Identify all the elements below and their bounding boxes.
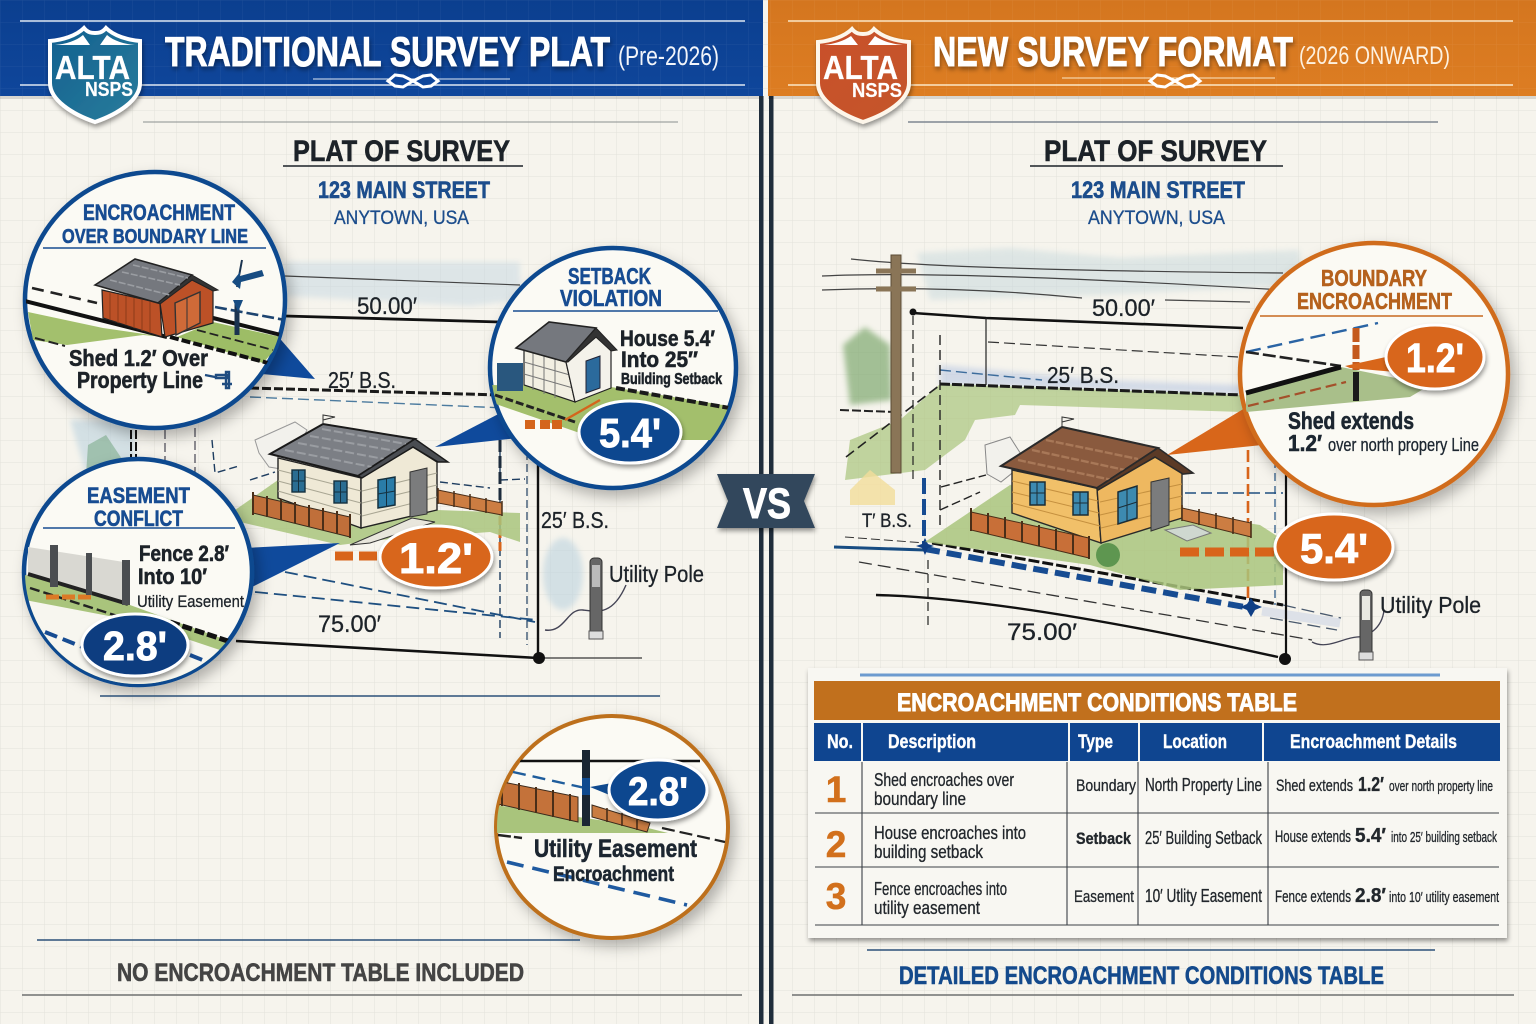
heading: plat of survey right: PLAT OF SURVEY xyxy=(1044,135,1267,168)
icon: ALTA NSPS shield blue xyxy=(50,28,140,122)
circle: boundary encroachment: Shed extends xyxy=(1288,408,1414,435)
rule under right header xyxy=(908,121,1438,123)
address left xyxy=(318,177,490,229)
orange dashes marker right xyxy=(1180,548,1280,556)
circle: easement conflict: EASEMENT xyxy=(87,483,190,508)
table row 2: 25′ Building Setback xyxy=(1145,828,1263,848)
label 50.00 left: 50.00′ xyxy=(357,293,417,320)
table row 3: 2.8′ xyxy=(1355,885,1386,907)
label utility pole right: Utility Pole xyxy=(1380,592,1481,618)
address right: 123 MAIN STREET xyxy=(1071,177,1245,204)
table row 1: 1.2′ xyxy=(1358,774,1384,796)
table row 2: building setback xyxy=(874,842,984,862)
circle: easement conflict: Into 10′ xyxy=(138,564,207,589)
table header row: Description xyxy=(888,732,976,753)
table row 3: utility easement xyxy=(874,898,980,918)
table row 3: Fence extends xyxy=(1275,887,1351,906)
table row 1: Shed encroaches over xyxy=(874,770,1014,790)
label 25 B.S. top left: 25′ B.S. xyxy=(328,367,396,393)
table row 3: 10′ Utlity Easement xyxy=(1145,886,1262,906)
callout pointer to oval from easement circle xyxy=(245,543,340,588)
table row 3: 3 xyxy=(826,876,846,917)
circle: setback violation: SETBACK xyxy=(568,263,651,289)
circle: easement conflict: Fence 2.8′ xyxy=(139,541,229,566)
badge 1.2 right: 1.2' xyxy=(1406,335,1464,381)
badge 5.4 left xyxy=(579,401,681,463)
table row 2: House encroaches into xyxy=(874,823,1026,843)
table row 1: 1 xyxy=(826,769,846,810)
table row 3: Easement xyxy=(1074,887,1134,906)
table title bar: ENCROACHMENT CONDITIONS TABLE xyxy=(897,689,1297,717)
circle: utility easement encroachment: Utility Easement xyxy=(534,835,698,863)
address right: ANYTOWN, USA xyxy=(1088,208,1225,229)
icon: yellow house right xyxy=(925,417,1283,590)
badge 2.8 on utility circle xyxy=(609,760,707,820)
table header row: Type xyxy=(1078,732,1113,753)
table header row: No. xyxy=(827,732,853,753)
table header row: Encroachment Details xyxy=(1290,732,1457,753)
circle: easement conflict: Utility Easement xyxy=(137,592,244,611)
circle: boundary encroachment xyxy=(1240,243,1508,505)
label side B.S. right panel: T′ B.S. xyxy=(862,511,912,532)
left title: TRADITIONAL SURVEY PLAT xyxy=(165,28,610,75)
circle: encroachment over boundary line: ENCROACHMENT xyxy=(83,200,235,225)
icon: grey house left xyxy=(228,415,520,545)
right plat drawing xyxy=(822,248,1384,665)
callout pointer to boundary circle xyxy=(1167,405,1262,455)
circle: utility easement encroachment: Encroachment xyxy=(553,863,674,886)
address right xyxy=(1071,177,1245,229)
table row 2: House extends xyxy=(1275,827,1351,846)
VS banner xyxy=(717,474,815,528)
table row 2 xyxy=(826,823,1497,865)
callout pointer to setback circle xyxy=(435,408,518,447)
table grid lines xyxy=(815,762,1499,925)
right header ornament xyxy=(1150,75,1200,87)
rule under left header xyxy=(143,121,678,123)
orange dashes marker left xyxy=(335,552,380,560)
VS banner: VS xyxy=(743,480,791,528)
badge 5.4 right xyxy=(1275,514,1393,580)
label 25 B.S. right panel: 25′ B.S. xyxy=(1047,362,1119,388)
circle: boundary encroachment: over north propery Line xyxy=(1328,435,1479,455)
left title date: (Pre-2026) xyxy=(618,41,719,71)
label utility pole left: Utility Pole xyxy=(609,561,704,587)
table row 2: 2 xyxy=(826,824,846,865)
icon: ALTA NSPS shield blue: NSPS xyxy=(85,79,133,101)
circle: encroachment over boundary line: Shed 1.2′ Over xyxy=(69,345,208,371)
icon: utility pole left xyxy=(589,558,603,639)
table row 1: boundary line xyxy=(874,789,966,809)
circle: setback violation: Into 25″ xyxy=(621,347,698,372)
circle: utility easement encroachment xyxy=(495,716,728,938)
circle: encroachment over boundary line: Property Line xyxy=(77,367,203,393)
left plat drawing xyxy=(70,262,642,664)
circle: boundary encroachment: BOUNDARY xyxy=(1321,265,1427,291)
badge 2.8 on easement circle: 2.8' xyxy=(103,623,167,669)
right header band xyxy=(768,0,1536,99)
table header row: Location xyxy=(1163,732,1227,753)
table row 3 xyxy=(826,876,1500,918)
circle: boundary encroachment: 1.2′ xyxy=(1288,430,1322,456)
table row 1: North Property Line xyxy=(1145,775,1262,795)
circle: boundary encroachment: ENCROACHMENT xyxy=(1297,288,1452,314)
address left: 123 MAIN STREET xyxy=(318,177,490,204)
circle: easement conflict: CONFLICT xyxy=(94,506,183,531)
panel: new survey format xyxy=(768,0,1536,995)
label 75.00 right: 75.00′ xyxy=(1007,619,1078,646)
caption: no encroachment table: NO ENCROACHMENT TABLE INCLUDED xyxy=(117,959,524,987)
table: encroachment conditions xyxy=(808,668,1507,938)
table row 1: Boundary xyxy=(1076,776,1136,795)
badge 5.4 left: 5.4' xyxy=(599,410,661,456)
circle: setback violation: VIOLATION xyxy=(560,285,662,311)
badge 1.2 right xyxy=(1386,325,1484,389)
badge 1.2 left: 1.2' xyxy=(399,535,473,583)
icon: ALTA NSPS shield blue: ALTA xyxy=(55,49,130,86)
circle: easement conflict xyxy=(24,459,252,690)
table row 1: Shed extends xyxy=(1276,776,1353,795)
icon: ALTA NSPS shield orange: ALTA xyxy=(823,49,898,86)
left header ornament xyxy=(388,75,438,87)
callout pointer to encroachment circle xyxy=(240,318,315,379)
icon: ALTA NSPS shield orange: NSPS xyxy=(852,80,902,102)
badge 2.8 on utility circle: 2.8' xyxy=(628,770,688,814)
table title bar xyxy=(814,681,1500,720)
circle: setback violation: Building Setback xyxy=(621,371,722,388)
badge 1.2 left xyxy=(380,526,492,588)
panel: traditional survey plat xyxy=(0,0,763,995)
center divider xyxy=(759,96,774,1024)
circle: encroachment over boundary line xyxy=(25,172,285,428)
badge 2.8 on easement circle xyxy=(82,614,188,676)
badge 5.4 right: 5.4' xyxy=(1300,525,1368,572)
caption: detailed table: DETAILED ENCROACHMENT CONDITIONS TABLE xyxy=(899,962,1384,990)
icon: utility pole right xyxy=(1359,590,1373,660)
table row 2: 5.4′ xyxy=(1355,825,1386,847)
label 50.00 right: 50.00′ xyxy=(1092,295,1155,322)
table row 1 xyxy=(826,769,1493,810)
right title date: (2026 ONWARD) xyxy=(1299,42,1450,70)
address left: ANYTOWN, USA xyxy=(334,208,469,229)
label 75.00 left: 75.00′ xyxy=(318,611,381,638)
table header row xyxy=(814,723,1500,761)
right title: NEW SURVEY FORMAT xyxy=(933,28,1293,75)
circle: setback violation xyxy=(490,248,736,488)
circle: setback violation: House 5.4′ xyxy=(620,326,715,351)
icon: ALTA NSPS shield orange xyxy=(818,29,909,122)
table row 3: Fence encroaches into xyxy=(874,879,1007,899)
table row 2: Setback xyxy=(1076,829,1131,848)
circle: encroachment over boundary line: OVER BOUNDARY LINE xyxy=(62,226,248,248)
rule above left empty area xyxy=(100,695,660,697)
left header band xyxy=(0,0,763,99)
heading: plat of survey left: PLAT OF SURVEY xyxy=(293,135,510,168)
label 25 B.S. right left: 25′ B.S. xyxy=(541,507,609,533)
